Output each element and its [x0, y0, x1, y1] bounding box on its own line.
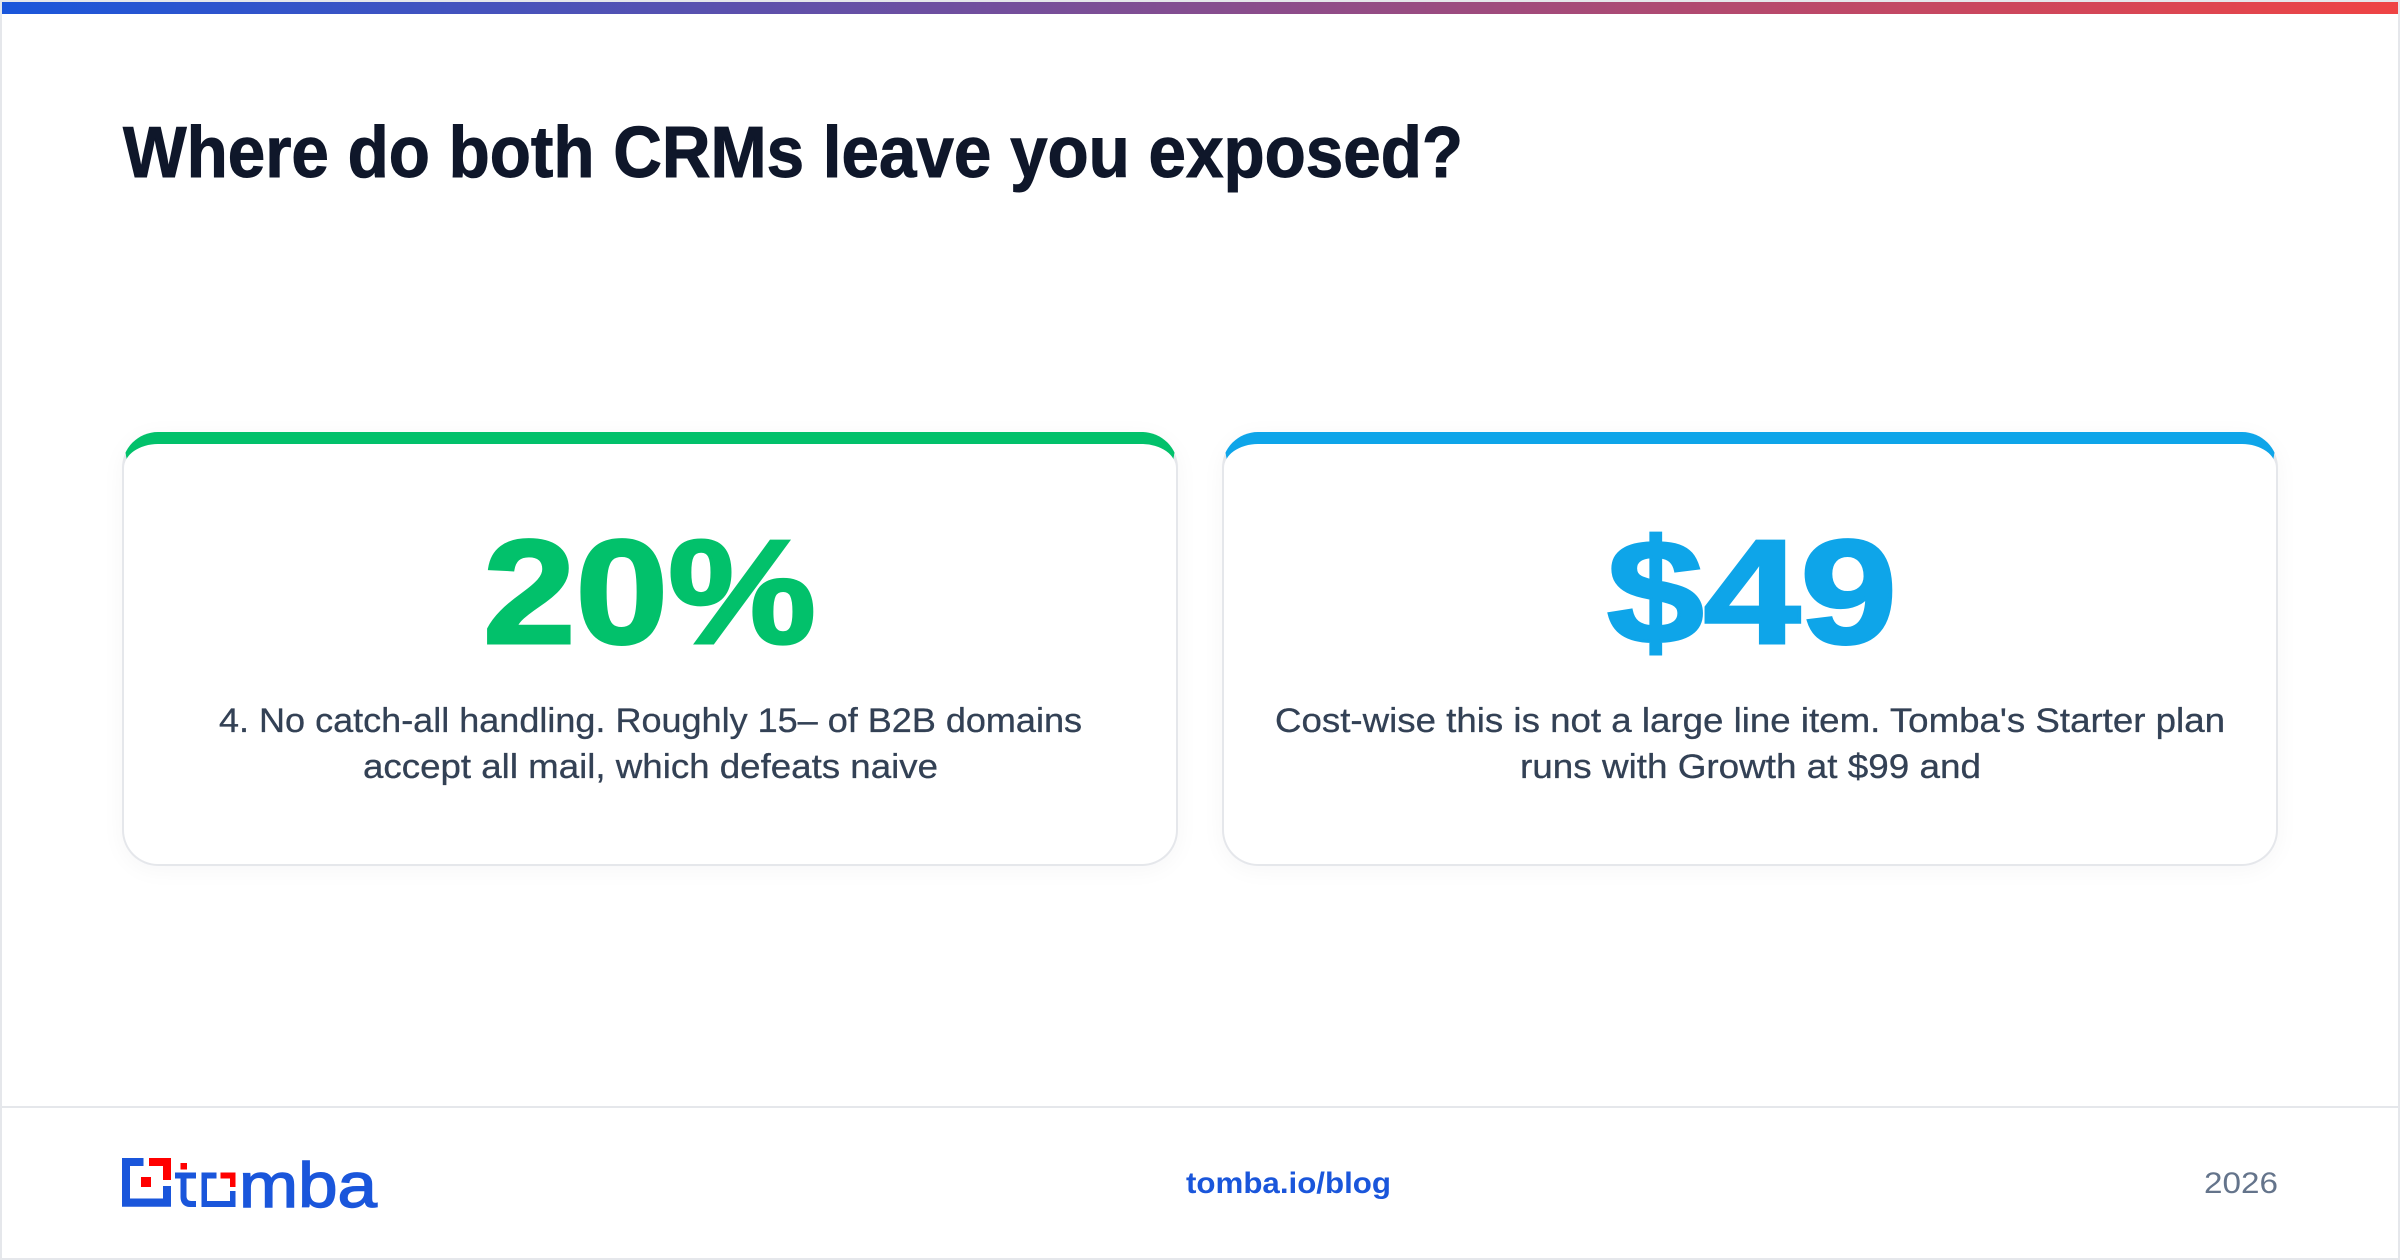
description: cost: runs with Growth at $99 and [1520, 748, 1981, 786]
description: catch-all handling: accept all mail, which defeats naive [363, 748, 938, 786]
description: cost: Cost-wise this is not a large line item. Tomba's Starter plan [1275, 702, 2225, 740]
footer year: 2026 [2204, 1167, 2278, 1200]
stat value: $49: $49 [1607, 510, 1897, 675]
logo mark [122, 1158, 236, 1207]
panel: 20% stat card [122, 432, 1178, 866]
description: catch-all handling: 4. No catch-all handling. Roughly 15– of B2B domains [219, 702, 1082, 740]
description: catch-all handling [219, 702, 1082, 786]
stat value: 20%: 20% [483, 510, 816, 675]
top gradient bar [2, 2, 2398, 14]
footer divider [2, 1106, 2398, 1108]
panel: $49 stat card [1222, 432, 2278, 866]
description: cost [1275, 702, 2225, 786]
footer logo: tomba [122, 1156, 378, 1214]
footer link: tomba.io/blog [1186, 1167, 1391, 1200]
